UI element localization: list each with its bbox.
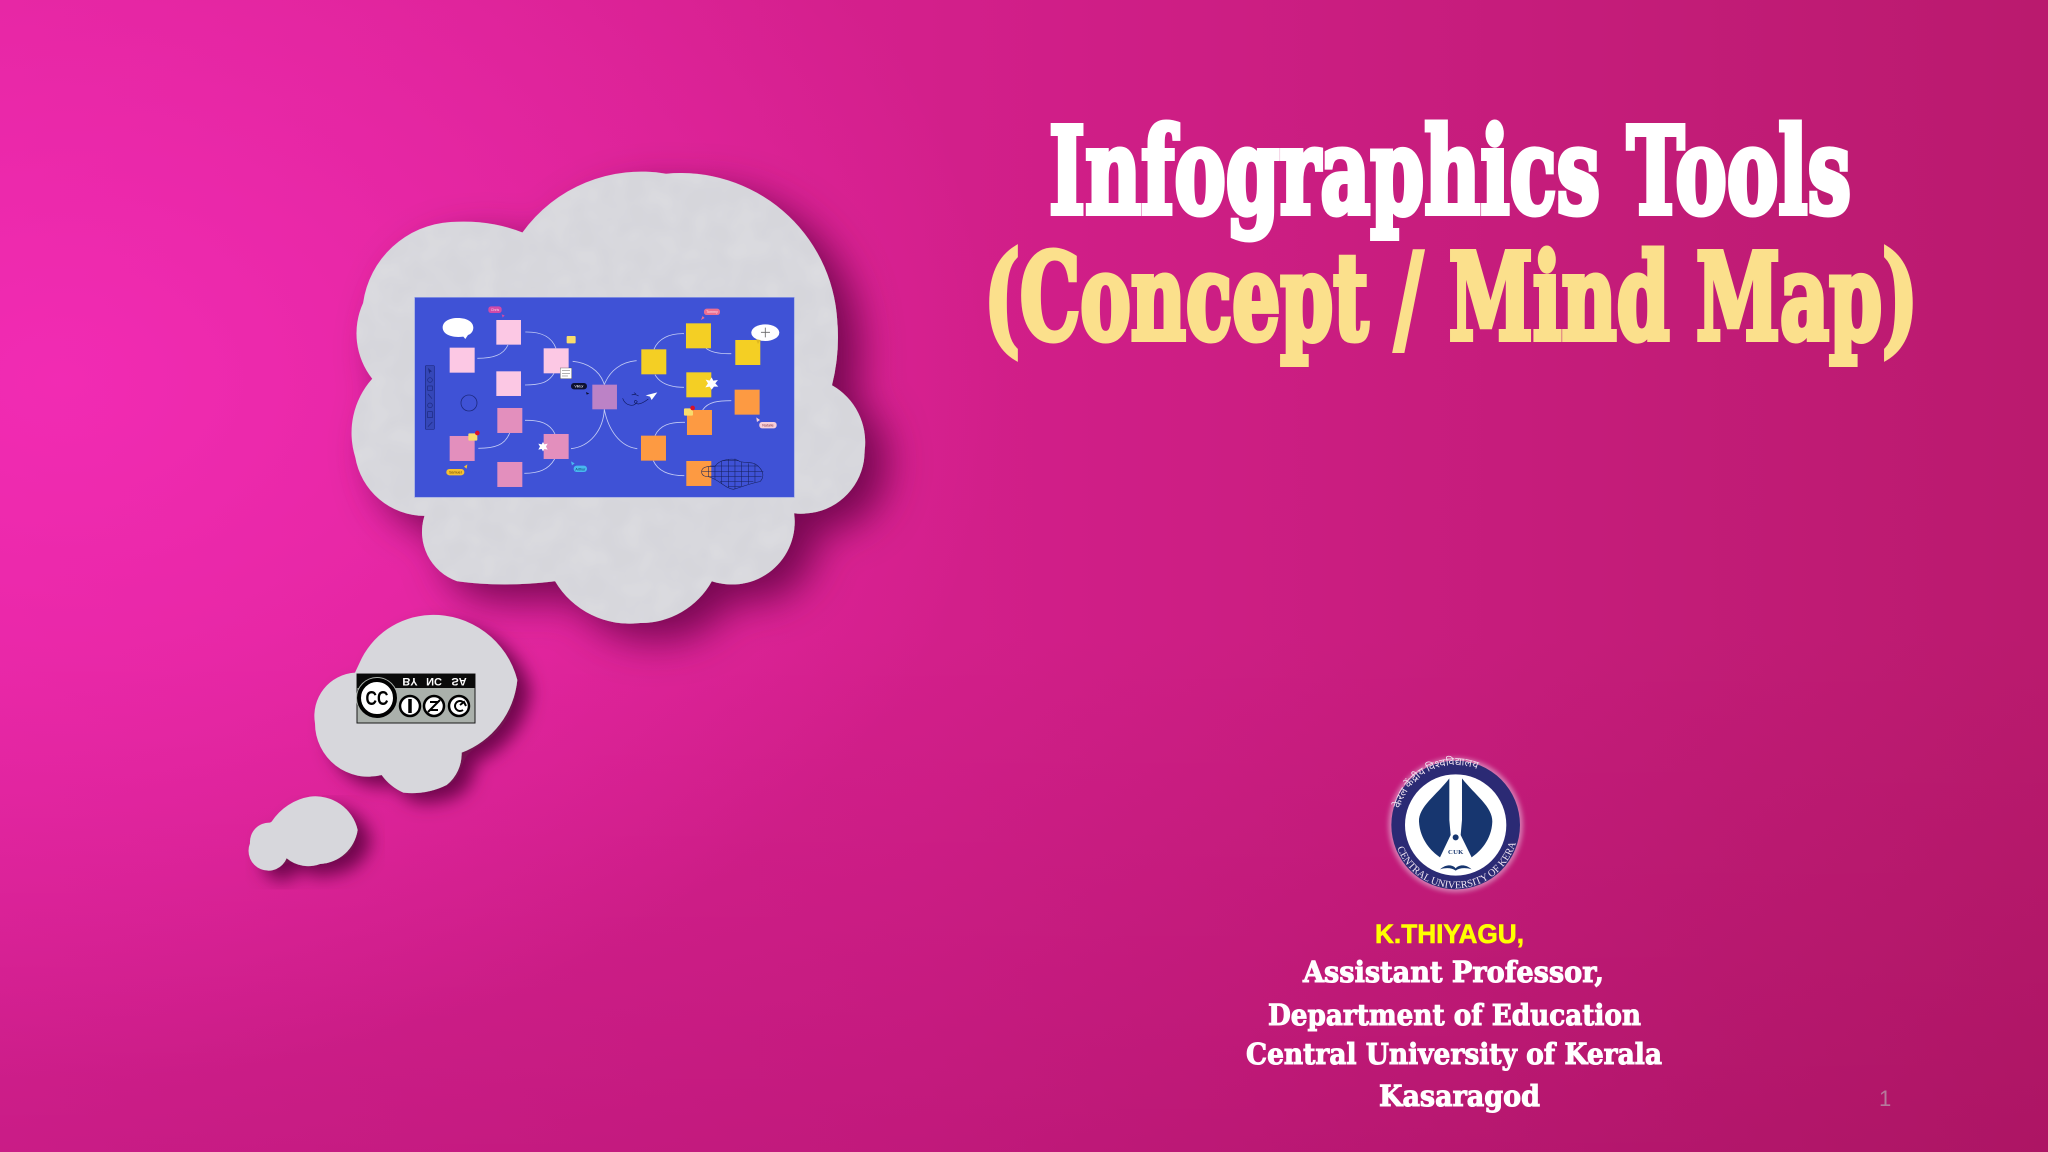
connector lines — [477, 332, 731, 476]
sticky notes: orange — [641, 390, 760, 486]
central node — [592, 385, 617, 409]
flipped licence labels: NC — [426, 675, 442, 687]
creative commons badge — [356, 674, 475, 723]
speech bubble right with plus — [751, 324, 779, 344]
author details: Department of Education — [1268, 998, 1641, 1032]
mind map illustration — [415, 297, 794, 497]
logo ring text: केरल केंद्रीय विश्वविद्यालय — [1391, 756, 1480, 808]
sparkle stars — [538, 377, 718, 451]
emblem details — [1440, 834, 1472, 871]
author details: Central University of Kerala — [1246, 1037, 1662, 1071]
author details — [1246, 955, 1662, 1113]
logo ring text: CENTRAL UNIVERSITY OF KERALA — [1398, 843, 1516, 888]
logo ring text — [1391, 756, 1516, 888]
cursor labels: Viktor — [574, 385, 584, 389]
cc circle: CC — [366, 688, 388, 710]
comment notes — [468, 336, 695, 441]
speech bubble left — [443, 318, 473, 339]
flipped licence labels — [402, 675, 467, 687]
page number: 1 — [1879, 1086, 1891, 1111]
cursor labels: Arthur — [575, 467, 586, 471]
cursor labels: Chris — [491, 308, 499, 312]
sticky notes: yellow — [641, 323, 760, 397]
thought cloud: small — [249, 796, 358, 871]
flipped licence labels: SA — [451, 675, 467, 687]
cursor labels: Natalie — [762, 424, 774, 428]
author details: Kasaragod — [1379, 1079, 1540, 1113]
author name: K.THIYAGU, — [1375, 919, 1524, 949]
cursor labels: Tommy — [706, 310, 718, 314]
university logo — [1386, 754, 1526, 896]
toolbar — [425, 366, 434, 429]
sticky notes: medium pink — [450, 408, 569, 487]
flame shapes — [1419, 778, 1492, 857]
circle doodle — [461, 395, 477, 411]
paper plane and doodle — [623, 392, 657, 405]
cursor labels: Samuel — [449, 471, 462, 475]
emblem details: CUK — [1448, 849, 1464, 856]
thought cloud: large — [352, 172, 865, 624]
cursor labels — [446, 306, 777, 475]
sticky notes: light pink — [450, 320, 569, 396]
hatched cloud doodle — [702, 459, 763, 489]
author details: Assistant Professor, — [1302, 955, 1604, 989]
flipped licence labels: BY — [402, 675, 418, 687]
licence icons — [400, 696, 469, 716]
thought cloud: medium — [314, 615, 517, 793]
author block — [1246, 919, 1662, 1113]
